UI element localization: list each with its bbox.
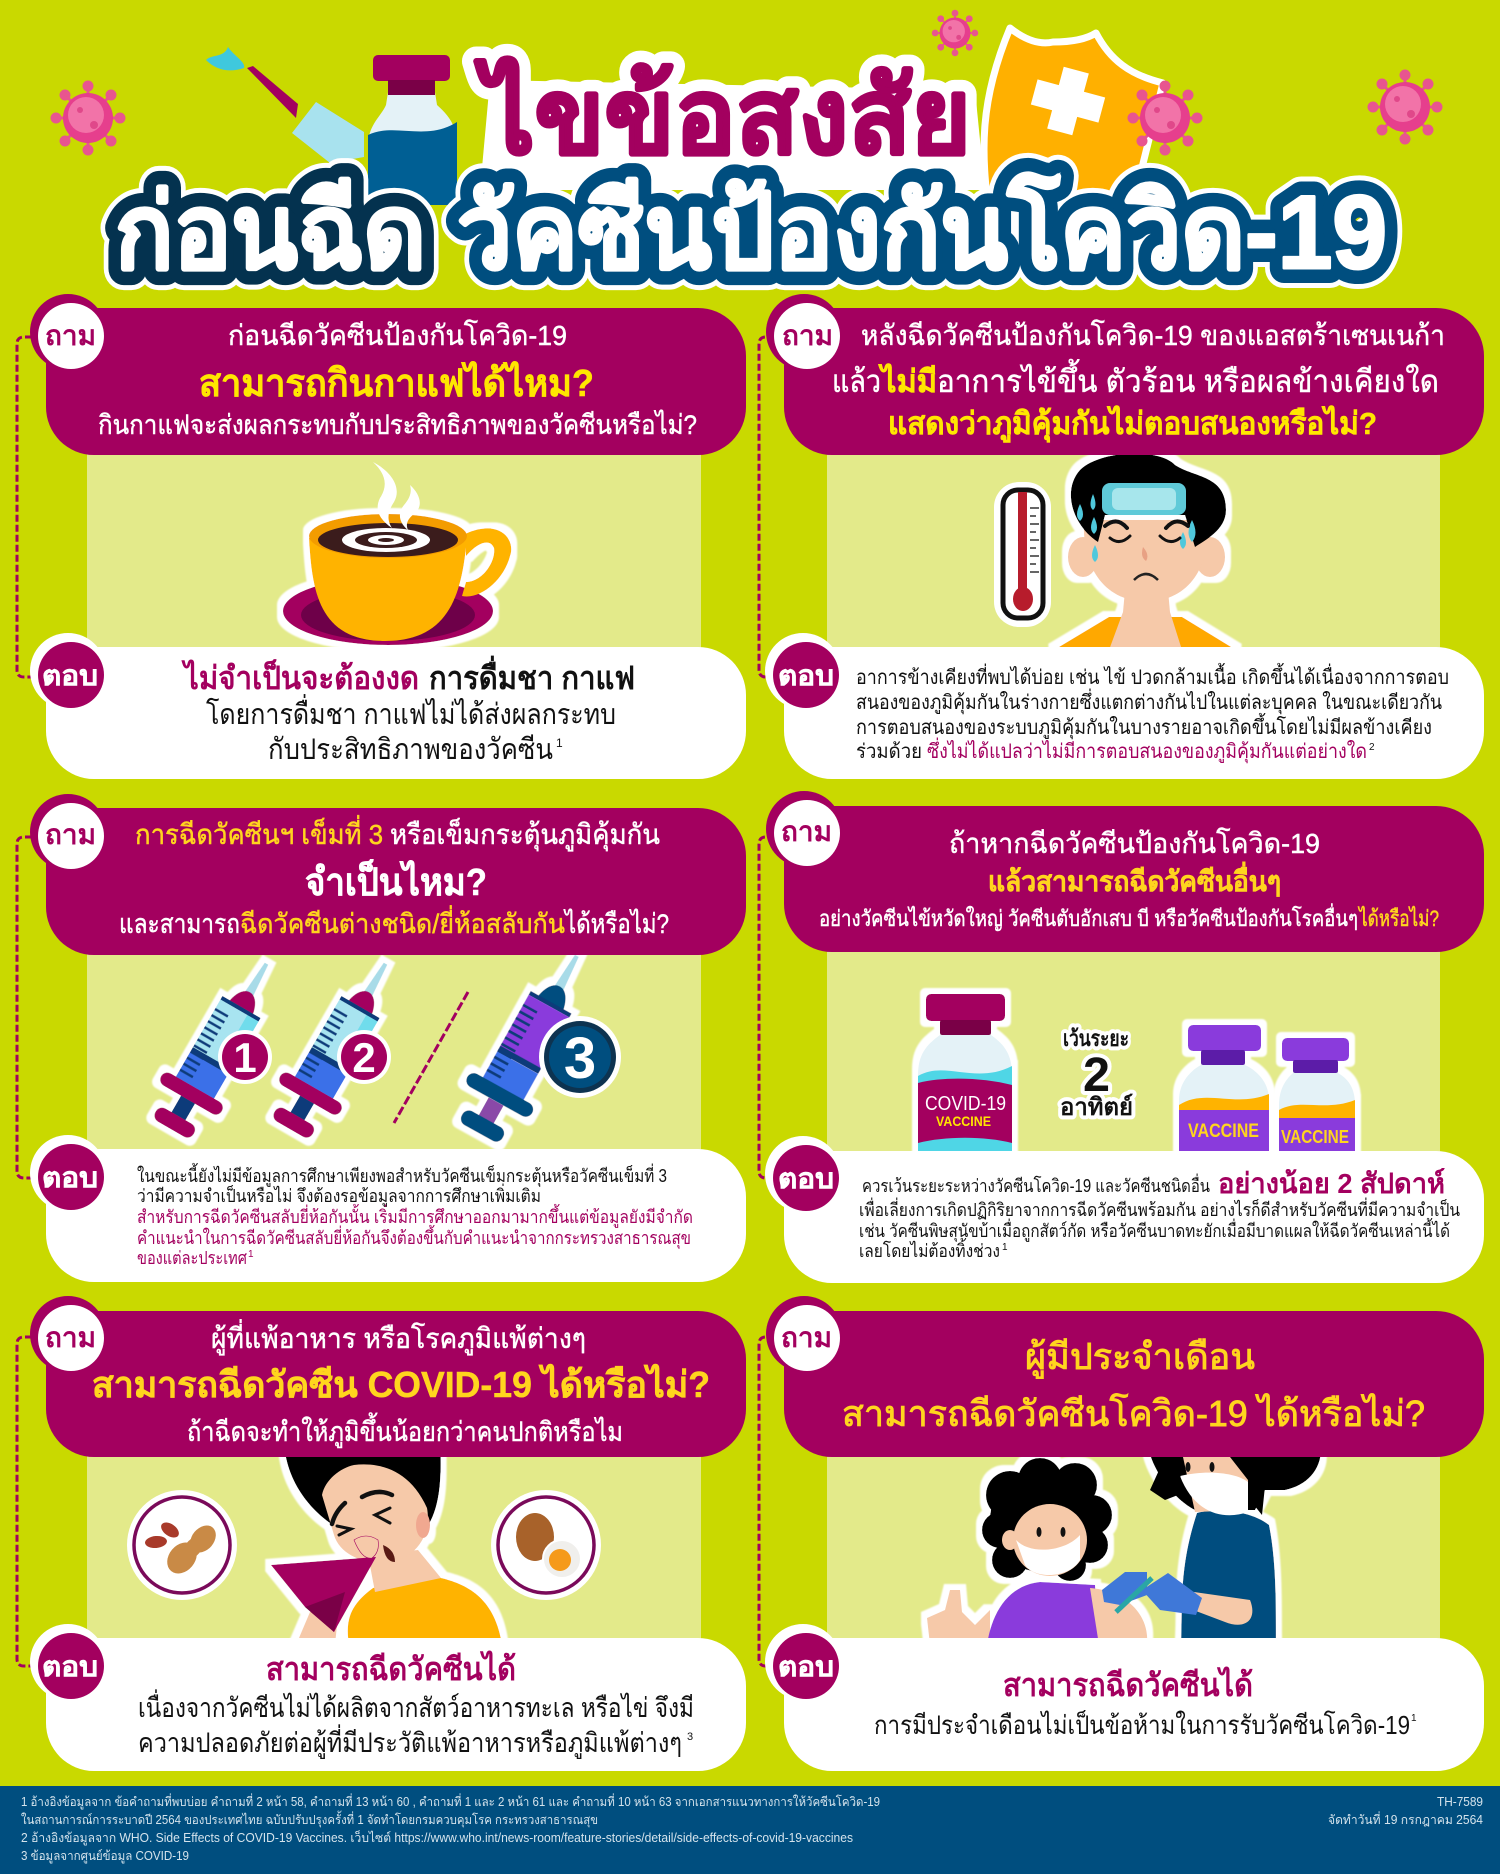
answer text xyxy=(138,1650,694,1759)
question banner xyxy=(784,1311,1484,1457)
title line 2 ink blue: วัคซีนป้องกันโควิด-19 xyxy=(457,172,1387,291)
question text: สามารถฉีดวัคซีนโควิด-19 ได้หรือไม่? xyxy=(842,1393,1425,1434)
title line 2 white outline: ก่อนฉีด xyxy=(115,175,426,291)
question text: ถ้าหากฉีดวัคซีนป้องกันโควิด-19 xyxy=(949,827,1320,859)
question text: กินกาแฟจะส่งผลกระทบกับประสิทธิภาพของวัคซีนหรือไม่? xyxy=(98,410,697,440)
badge: answer: ตอบ xyxy=(778,1163,834,1194)
badge: question: ถาม xyxy=(781,816,832,847)
answer text: กับประสิทธิภาพของวัคซีน xyxy=(268,734,553,766)
answer text: 1 xyxy=(1002,1242,1008,1253)
question text: อย่างวัคซีนไข้หวัดใหญ่ วัคซีนตับอักเสบ บี หรือวัคซีนป้องกันโรคอื่นๆ xyxy=(819,903,1358,931)
answer text: ควรเว้นระยะระหว่างวัคซีนโควิด-19 และวัคซีนชนิดอื่น xyxy=(862,1173,1210,1196)
answer text: 3 xyxy=(687,1731,693,1743)
title line 1: ไขข้อสงสัย xyxy=(473,57,971,176)
answer text xyxy=(181,655,635,766)
question text: สามารถกินกาแฟได้ไหม? xyxy=(199,361,594,405)
badge: answer xyxy=(30,1624,106,1700)
question banner xyxy=(46,808,746,955)
number badge 3 xyxy=(539,1016,621,1098)
title xyxy=(115,57,1387,291)
icon: other vaccine vials: VACCINE xyxy=(1281,1127,1349,1147)
icon: virus top xyxy=(933,11,977,55)
question text: แล้ว xyxy=(832,364,881,399)
connector xyxy=(17,1337,32,1666)
icon: syringe 1 xyxy=(141,946,297,1147)
footnotes: 1 อ้างอิงข้อมูลจาก ข้อคำถามที่พบบ่อย คำถามที่ 2 หน้า 58, คำถามที่ 13 หน้า 60 , คำถามที่ 1 และ 2 หน้า 61 และ คำถามที่ 10 หน้า 63 จากเอกสารแนวทางการให้วัคซีนโควิด-19 xyxy=(21,1793,880,1810)
connector xyxy=(759,337,775,677)
footer background xyxy=(0,1786,1500,1874)
illustration backdrop xyxy=(87,940,701,1165)
question text: ผู้มีประจำเดือน xyxy=(1025,1336,1255,1379)
icon: cool pad and sweat xyxy=(1077,483,1196,580)
question text: ผู้ที่แพ้อาหาร หรือโรคภูมิแพ้ต่างๆ xyxy=(211,1319,586,1356)
answer text: การมีประจำเดือนไม่เป็นข้อห้ามในการรับวัคซีนโควิด-19 xyxy=(874,1709,1410,1740)
footnotes xyxy=(21,1793,880,1864)
question banner xyxy=(784,308,1484,455)
illustration backdrop xyxy=(87,440,701,660)
connector xyxy=(759,1337,775,1666)
document code and date: จัดทำวันที่ 19 กรกฎาคม 2564 xyxy=(1328,1811,1483,1827)
number badge 1 xyxy=(218,1030,272,1084)
question banner xyxy=(46,308,746,455)
badge: answer xyxy=(765,633,841,709)
icon: peanut circle xyxy=(127,1490,237,1600)
label: two-week gap xyxy=(1060,1026,1133,1121)
number badge 2: 2 xyxy=(352,1034,376,1081)
question text: ไม่มี xyxy=(878,363,937,399)
icon: sneezing person xyxy=(271,1440,502,1645)
footer xyxy=(0,1786,1500,1874)
document code and date xyxy=(1328,1795,1483,1827)
question text: จำเป็นไหม? xyxy=(305,859,487,904)
answer text: ซึ่งไม่ได้แปลว่าไม่มีการตอบสนองของภูมิคุ้มกันแต่อย่างใด xyxy=(927,737,1367,764)
icon: virus right xyxy=(1369,71,1441,143)
answer text: คำแนะนำในการฉีดวัคซีนสลับยี่ห้อกันจึงต้องขึ้นกับคำแนะนำจากกระทรวงสาธารณสุข xyxy=(137,1225,691,1249)
number badge 2 xyxy=(337,1030,391,1084)
badge: question: ถาม xyxy=(782,320,833,351)
footnotes: 2 อ้างอิงข้อมูลจาก WHO. Side Effects of COVID-19 Vaccines. เว็บไซต์ https://www.who.int/news-room/feature-stories/detail/side-effects-of-covid-19-vaccines xyxy=(21,1830,853,1846)
badge: question: ถาม xyxy=(781,1322,832,1353)
icon: covid vaccine vial: VACCINE xyxy=(936,1113,991,1129)
icon: girl receiving vaccine xyxy=(927,1458,1147,1645)
answer text: สำหรับการฉีดวัคซีนสลับยี่ห้อกันนั้น เริ่มมีการศึกษาออกมามากขึ้นแต่ข้อมูลยังมีจำกัด xyxy=(137,1204,693,1228)
question text: แสดงว่าภูมิคุ้มกันไม่ตอบสนองหรือไม่? xyxy=(888,405,1377,443)
footnotes: 3 ข้อมูลจากศูนย์ข้อมูล COVID-19 xyxy=(21,1849,189,1864)
icon: other vaccine vials xyxy=(1179,1025,1355,1160)
icon: virus left xyxy=(52,82,124,154)
connector xyxy=(17,837,32,1178)
title line 2 white outline xyxy=(115,172,1387,291)
question text: ถ้าฉีดจะทำให้ภูมิขึ้นน้อยกว่าคนปกติหรือไม xyxy=(187,1412,623,1448)
icon: thermometer xyxy=(994,482,1051,627)
answer text: อาการข้างเคียงที่พบได้บ่อย เช่น ไข้ ปวดกล้ามเนื้อ เกิดขึ้นได้เนื่องจากการตอบ xyxy=(856,663,1449,689)
number badge 3: 3 xyxy=(564,1026,596,1091)
header illustrations xyxy=(52,11,1441,220)
panel: third dose question xyxy=(17,794,746,1282)
answer text: การตอบสนองของระบบภูมิคุ้มกันในบางรายอาจเกิดขึ้นโดยไม่มีผลข้างเคียง xyxy=(856,713,1432,740)
panel: allergy question xyxy=(17,1296,746,1771)
divider dashed line xyxy=(394,992,468,1123)
panel: menstruation question xyxy=(759,1296,1484,1771)
panel: no side effects question xyxy=(759,294,1484,779)
icon: steam xyxy=(373,462,420,530)
answer text: ของแต่ละประเทศ xyxy=(137,1248,247,1268)
badge: question: ถาม xyxy=(45,819,96,850)
answer text: ไม่จำเป็นจะต้องงด xyxy=(181,658,419,696)
answer text: สามารถฉีดวัคซีนได้ xyxy=(1003,1666,1253,1703)
label: two-week gap: 2 xyxy=(1083,1049,1110,1102)
icon: covid vaccine vial xyxy=(918,994,1012,1160)
connector xyxy=(759,837,775,1178)
badge: answer xyxy=(765,1624,841,1700)
icon: syringe xyxy=(206,47,364,163)
footnotes: ในสถานการณ์การระบาดปี 2564 ของประเทศไทย ฉบับปรับปรุงครั้งที่ 1 จัดทำโดยกรมควบคุมโรค กระทรวงสาธารณสุข xyxy=(21,1810,598,1828)
answer text: ในขณะนี้ยังไม่มีข้อมูลการศึกษาเพียงพอสำหรับวัคซีนเข็มกระตุ้นหรือวัคซีนเข็มที่ 3 xyxy=(137,1163,667,1187)
answer text: 1 xyxy=(248,1249,254,1260)
badge: question xyxy=(30,1296,106,1372)
badge: answer: ตอบ xyxy=(42,1162,98,1193)
title line 2 letters xyxy=(115,172,1387,291)
question text xyxy=(842,1336,1425,1434)
question banner xyxy=(784,806,1484,952)
answer text: ว่ามีความจำเป็นหรือไม่ จึงต้องรอข้อมูลจากการศึกษาเพิ่มเติม xyxy=(137,1183,541,1207)
answer box xyxy=(784,1151,1484,1283)
illustration backdrop xyxy=(827,1440,1440,1650)
badge: answer xyxy=(30,1135,106,1211)
number badge 1: 1 xyxy=(233,1034,257,1081)
answer box xyxy=(46,1638,746,1771)
badge: question xyxy=(766,1296,842,1372)
badge: answer: ตอบ xyxy=(42,660,98,691)
answer text xyxy=(859,1168,1460,1261)
title line 1: ไขข้อสงสัย xyxy=(473,57,971,176)
question text xyxy=(819,827,1439,931)
answer text: โดยการดื่มชา กาแฟไม่ได้ส่งผลกระทบ xyxy=(206,694,616,731)
question text: หลังฉีดวัคซีนป้องกันโควิด-19 ของแอสตร้าเซนเนก้า xyxy=(861,319,1445,351)
icon: syringe 3 xyxy=(446,938,609,1151)
badge: question xyxy=(30,294,106,370)
badge: answer: ตอบ xyxy=(778,1651,834,1682)
icon: coffee cup xyxy=(283,514,511,645)
answer box xyxy=(46,1149,746,1282)
answer text: อย่างน้อย 2 สัปดาห์ xyxy=(1218,1168,1445,1199)
icon: egg circle xyxy=(491,1490,601,1600)
answer text: ความปลอดภัยต่อผู้ที่มีประวัติแพ้อาหารหรือภูมิแพ้ต่างๆ xyxy=(138,1724,682,1759)
question banner xyxy=(46,1311,746,1457)
answer box xyxy=(784,647,1484,779)
icon: person with fever xyxy=(1054,454,1236,650)
answer text: สนองของภูมิคุ้มกันในร่างกายซึ่งแตกต่างกันไปในแต่ละบุคคล ในขณะเดียวกัน xyxy=(856,688,1442,715)
question text: สามารถฉีดวัคซีน COVID-19 ได้หรือไม่? xyxy=(92,1363,710,1405)
connector xyxy=(17,337,32,677)
answer text: ร่วมด้วย xyxy=(856,741,922,763)
badge: question: ถาม xyxy=(45,1322,96,1353)
answer text: การดื่มชา กาแฟ xyxy=(429,655,635,696)
question text: ได้หรือไม่? xyxy=(563,909,669,939)
document code and date: TH-7589 xyxy=(1437,1795,1483,1809)
answer text: 2 xyxy=(1369,742,1375,753)
title line 1 white backing xyxy=(480,80,985,190)
illustration backdrop xyxy=(827,940,1440,1165)
badge: question xyxy=(766,294,842,370)
badge: question xyxy=(30,794,106,870)
question text: การฉีดวัคซีนฯ เข็มที่ 3 xyxy=(135,815,383,850)
icon: covid vaccine vial: COVID-19 xyxy=(925,1093,1006,1115)
icon: shield with plus xyxy=(984,28,1163,220)
question text: ได้หรือไม่? xyxy=(1357,906,1439,931)
question text: แล้วสามารถฉีดวัคซีนอื่นๆ xyxy=(988,861,1281,897)
answer box xyxy=(784,1638,1484,1771)
icon: other vaccine vials: VACCINE xyxy=(1188,1121,1259,1142)
badge: question xyxy=(766,791,842,867)
label: two-week gap: อาทิตย์ xyxy=(1060,1093,1133,1121)
illustration backdrop xyxy=(827,440,1440,660)
answer text: สามารถฉีดวัคซีนได้ xyxy=(266,1650,516,1687)
badge: answer xyxy=(765,1136,841,1212)
question text: ฉีดวัคซีนต่างชนิด/ยี่ห้อสลับกัน xyxy=(240,905,565,939)
title line 2 ink dark: ก่อนฉีด xyxy=(115,175,426,291)
answer text xyxy=(137,1163,693,1268)
question text xyxy=(832,319,1445,443)
question text: อาการไข้ขึ้น ตัวร้อน หรือผลข้างเคียงใด xyxy=(937,359,1439,399)
badge: question: ถาม xyxy=(45,320,96,351)
panel: other vaccines question xyxy=(759,791,1484,1283)
title line 2 letters: ก่อนฉีด xyxy=(115,175,426,291)
answer text: เลยโดยไม่ต้องทิ้งช่วง xyxy=(859,1238,1000,1261)
question text xyxy=(119,815,669,939)
answer text: 1 xyxy=(1411,1713,1417,1724)
question text xyxy=(92,1319,710,1448)
answer text xyxy=(874,1666,1417,1740)
label: two-week gap: เว้นระยะ xyxy=(1063,1026,1129,1051)
badge: answer xyxy=(30,633,106,709)
badge: answer: ตอบ xyxy=(42,1651,98,1682)
question text xyxy=(98,319,697,440)
question text: ก่อนฉีดวัคซีนป้องกันโควิด-19 xyxy=(228,319,567,351)
question text: และสามารถ xyxy=(119,909,240,939)
title line 2 white outline: วัคซีนป้องกันโควิด-19 xyxy=(457,172,1387,291)
icon: vial xyxy=(368,55,457,205)
icon: syringe 2 xyxy=(260,946,416,1147)
answer text: เนื่องจากวัคซีนไม่ได้ผลิตจากสัตว์อาหารทะเล หรือไข่ จึงมี xyxy=(138,1689,694,1723)
illustration backdrop xyxy=(87,1440,701,1650)
panel: coffee question xyxy=(17,294,746,779)
badge: answer: ตอบ xyxy=(778,660,834,691)
answer text xyxy=(856,663,1449,764)
question text: หรือเข็มกระตุ้นภูมิคุ้มกัน xyxy=(390,817,660,852)
answer text: 1 xyxy=(556,736,563,750)
title line 2 letters: วัคซีนป้องกันโควิด-19 xyxy=(457,172,1387,291)
icon: virus on shield xyxy=(1129,82,1201,154)
answer box xyxy=(46,647,746,779)
icon: nurse xyxy=(1102,1440,1321,1645)
